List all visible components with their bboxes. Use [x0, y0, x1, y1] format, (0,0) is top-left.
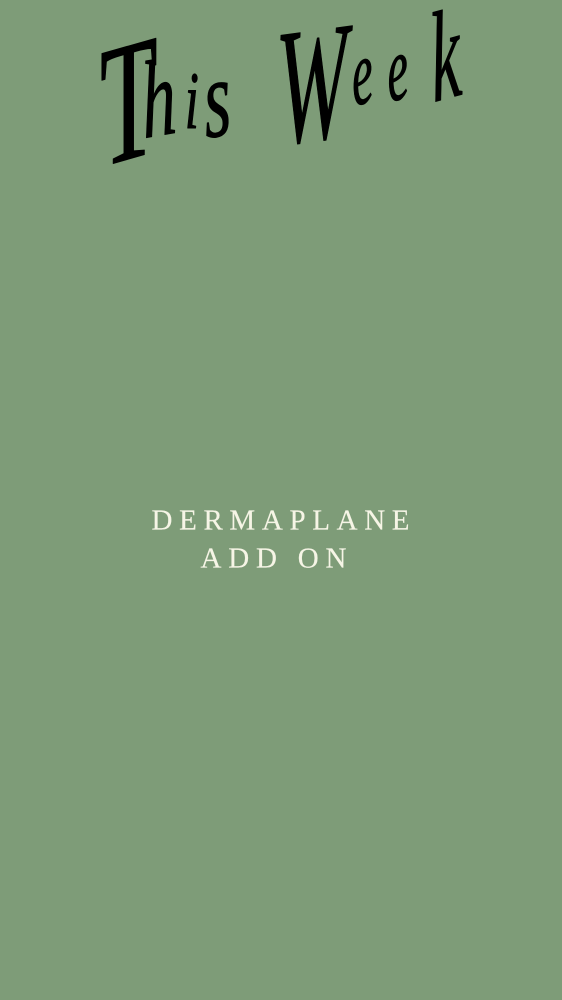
subtitle line 2: ADD ON	[200, 543, 347, 575]
title word: Week: e	[348, 20, 376, 126]
subtitle: Dermaplane add on	[152, 504, 410, 575]
title word: Week: e	[383, 16, 411, 122]
title word: This: T	[88, 0, 172, 203]
title: This Week	[88, 0, 466, 203]
subtitle line 1: DERMAPLANE	[152, 504, 410, 536]
title word: This: s	[199, 35, 234, 163]
title word: This: i	[185, 55, 199, 146]
title word: This: h	[137, 34, 179, 162]
